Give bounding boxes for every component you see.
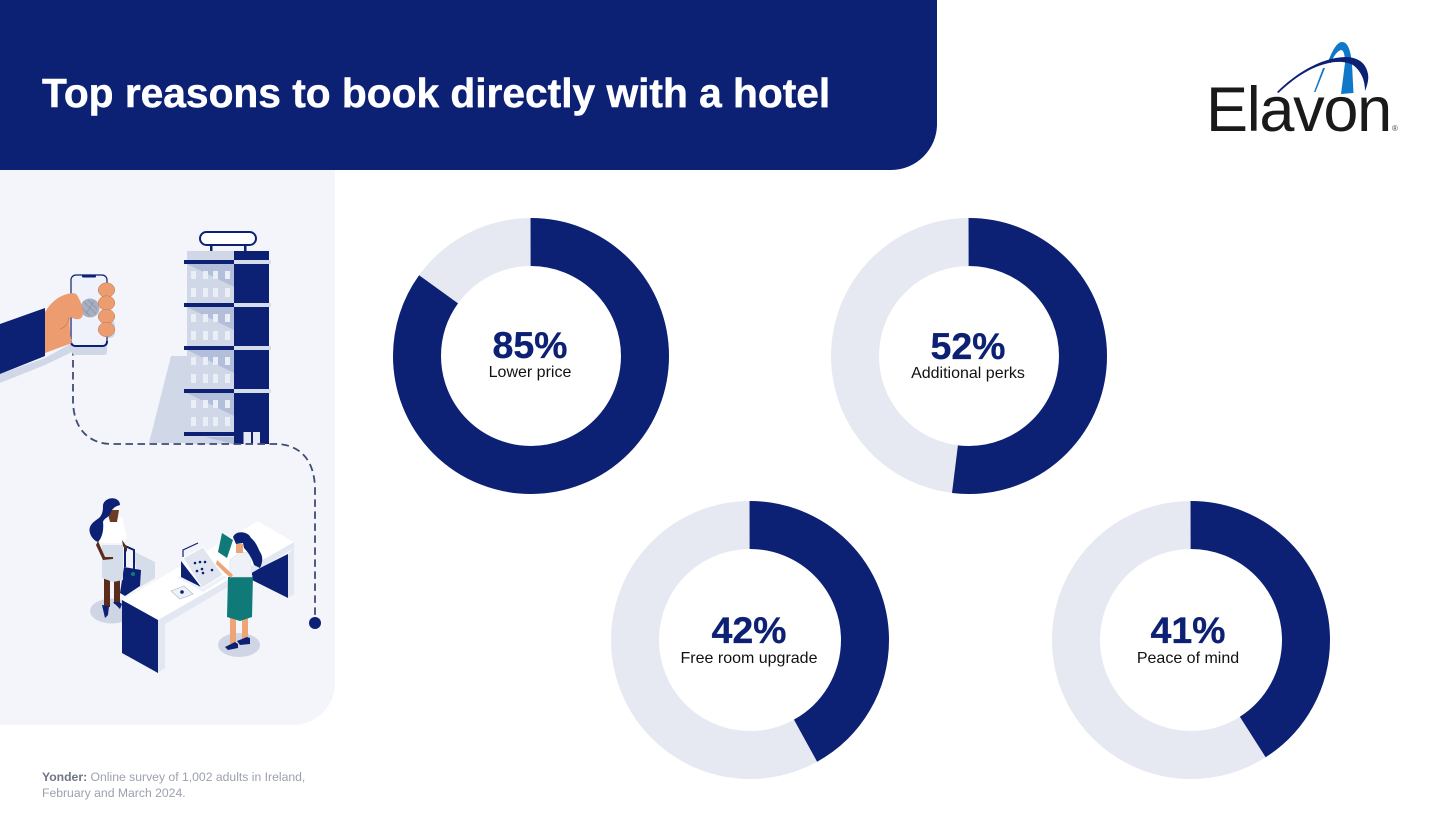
logo swoosh: navy [1277,57,1368,93]
logo thin leg [1314,68,1325,92]
donut: 52% additional perks [831,218,1107,494]
title: Top reasons to book directly with a hotel [42,70,830,116]
source note [42,770,305,800]
label: 42% free room upgrade: Free room upgrade [681,650,817,667]
label: 85% lower price: 85% [492,324,568,366]
label: 52% additional perks [911,325,1025,382]
suitcase [120,546,155,596]
card on desk [171,586,193,599]
donut: 42% free room upgrade [611,501,889,779]
source note: February and March 2024. [42,786,186,800]
logo wordmark: Elavon [1206,75,1391,145]
label: 52% additional perks: 52% [930,325,1006,367]
logo arc: light blue [1328,42,1354,94]
registered mark: ® [1392,124,1398,133]
label: 41% peace of mind [1137,609,1239,667]
guest shadow [90,598,134,624]
employee shadow [218,633,260,657]
donut: 85% lower price [393,218,669,494]
donut: 41% peace of mind [1052,501,1330,779]
label: 42% free room upgrade: 42% [711,609,787,651]
illustration: booking journey [0,231,321,673]
guest figure [89,498,127,618]
illustration panel [0,170,335,725]
logo: Elavon [1206,42,1398,145]
label: 85% lower price [489,324,571,381]
label: 41% peace of mind: 41% [1150,609,1226,651]
source note: Yonder: Online survey of 1,002 adults in Ireland, [42,770,305,784]
icon: hotel building [149,232,271,444]
icon: dashed journey path [73,348,315,620]
icon: path end dot [309,617,321,629]
label: 52% additional perks: Additional perks [911,365,1025,382]
employee figure [216,532,262,650]
desk [122,521,294,673]
icon: hand holding phone [0,275,115,383]
label: 41% peace of mind: Peace of mind [1137,650,1239,667]
label: 85% lower price: Lower price [489,364,571,381]
cash register [177,543,227,592]
header banner [0,0,937,170]
icon: reception scene [89,498,294,673]
label: 42% free room upgrade [681,609,817,667]
